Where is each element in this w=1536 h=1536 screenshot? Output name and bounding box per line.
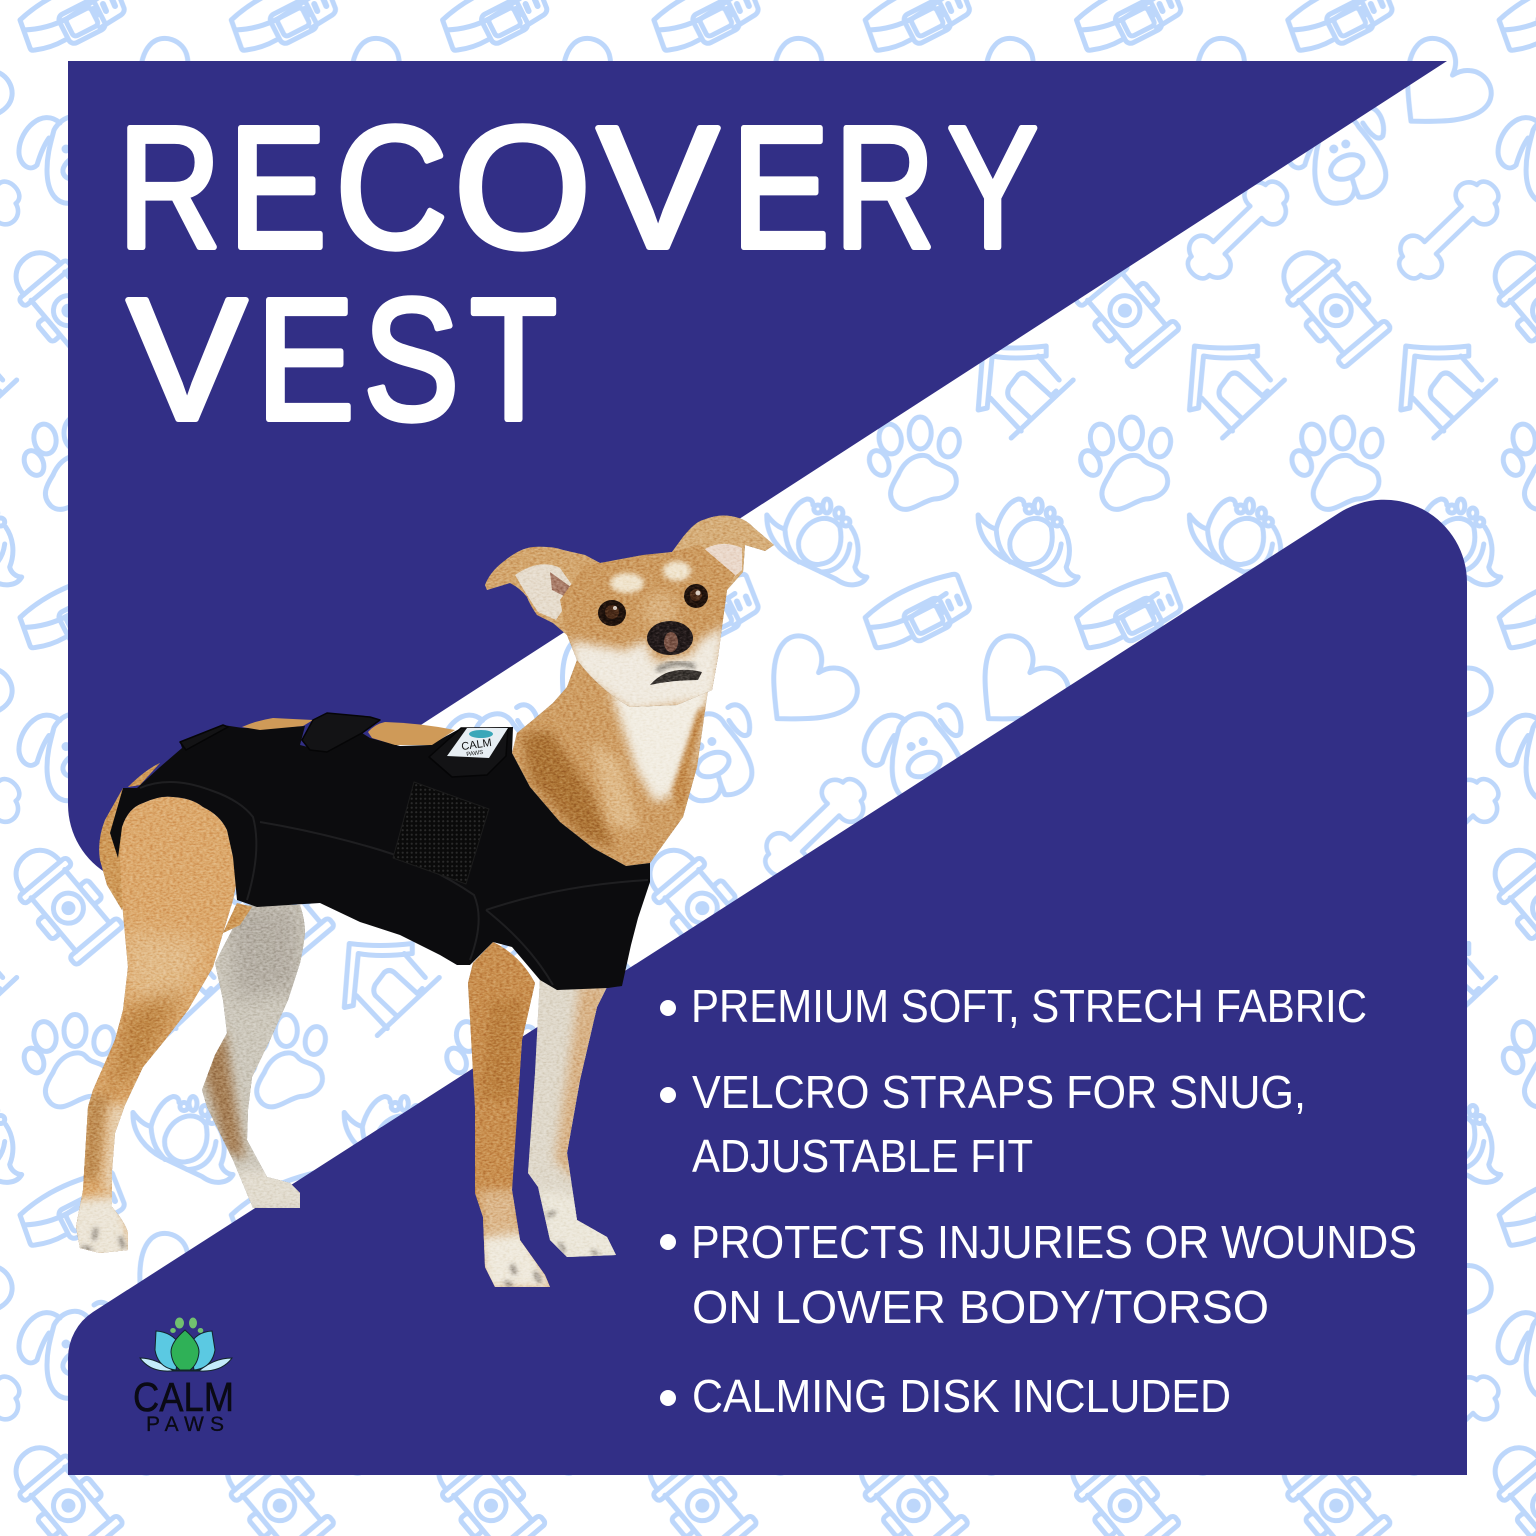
title: R — [834, 90, 935, 284]
eyes — [598, 600, 626, 626]
icon: lotus and paw — [140, 1318, 232, 1371]
bullet: velcro straps — [660, 1066, 1306, 1182]
bullet: protects injuries — [660, 1216, 1417, 1333]
panel: top navy diagonal — [68, 61, 1447, 885]
vest seams and folds — [140, 782, 648, 985]
vest straps — [180, 713, 508, 777]
far front leg — [525, 975, 620, 1260]
vest label tag: CALM — [461, 737, 493, 753]
mesh pocket — [393, 782, 489, 884]
title: V — [128, 262, 246, 456]
vest body — [110, 725, 650, 990]
title: R — [118, 90, 221, 284]
logo subtitle: PAWS — [146, 1413, 224, 1436]
title: O — [454, 90, 591, 284]
mouth — [650, 670, 702, 685]
nose — [647, 621, 693, 655]
vest label tag: PAWS — [466, 750, 484, 758]
tan back patches — [242, 718, 455, 745]
feature list — [660, 980, 1417, 1422]
near hind leg — [76, 796, 236, 1253]
bullet: protects injuries: PROTECTS INJURIES OR WOUNDS — [691, 1216, 1417, 1268]
title: E — [256, 262, 354, 456]
left ear — [485, 547, 600, 635]
neck and chest — [512, 660, 708, 866]
title: E — [228, 90, 326, 284]
near front leg — [468, 942, 550, 1287]
logo: Calm Paws — [133, 1318, 234, 1436]
bullet: soft fabric: PREMIUM SOFT, STRECH FABRIC — [691, 980, 1367, 1032]
tan rump behind vest — [99, 763, 252, 933]
title: V — [598, 90, 718, 284]
logo wordmark: CALM — [133, 1374, 234, 1420]
title — [118, 90, 1038, 456]
bullet: protects injuries: ON LOWER BODY/TORSO — [692, 1281, 1269, 1333]
vest label tag — [447, 728, 508, 758]
dog head group — [485, 516, 774, 715]
head — [560, 545, 735, 707]
panel: bottom navy diagonal — [68, 500, 1467, 1475]
bullet: velcro straps: ADJUSTABLE FIT — [692, 1130, 1033, 1182]
bullet: velcro straps: VELCRO STRAPS FOR SNUG, — [692, 1066, 1306, 1118]
right ear — [672, 516, 774, 590]
title: C — [336, 90, 448, 284]
far hind leg — [202, 905, 305, 1208]
title: Y — [948, 90, 1038, 284]
title: T — [470, 262, 557, 456]
dog legs and neck — [70, 655, 715, 1290]
dog wearing black recovery vest — [70, 516, 774, 1290]
title: E — [732, 90, 830, 284]
bullet: calming disk: CALMING DISK INCLUDED — [692, 1370, 1231, 1422]
title: S — [364, 262, 459, 456]
